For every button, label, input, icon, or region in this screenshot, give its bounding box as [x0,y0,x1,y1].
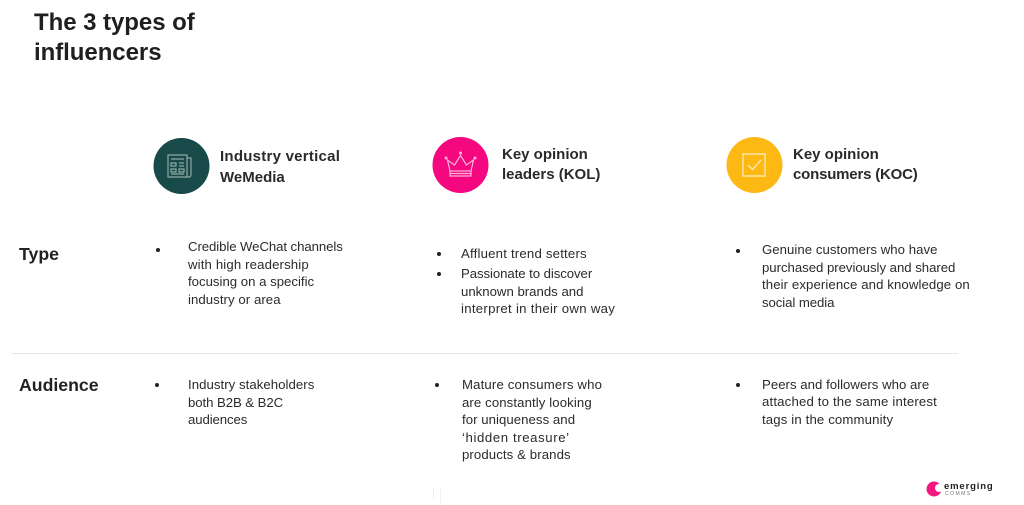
text block: KOC audience: attached to the same interest [762,394,937,409]
text block: WeMedia type [156,239,343,306]
title [34,9,195,66]
text block: KOC type: their experience and knowledge on [762,277,970,292]
icon: checkbox [726,137,782,193]
text block: KOC audience [736,376,937,426]
logo wordmark: emerging [944,481,994,492]
column header: Key opinion consumers (KOC) [726,137,918,193]
row label: Audience: Audience [19,375,99,395]
text block: KOL audience: Mature consumers who [462,377,602,392]
text block: WeMedia audience: Industry stakeholders [188,377,314,392]
text block: WeMedia type: with high readership [188,256,309,272]
heading: consumers (KOC) [793,166,918,183]
heading [220,148,340,186]
text block: KOL type [437,246,615,316]
text block: KOL type: interpret in their own way [461,301,615,316]
icon: newspaper [154,138,210,194]
text block: WeMedia audience: both B2B & B2C [188,394,283,410]
text block: WeMedia type: industry or area [188,292,281,306]
text block: KOC type: Genuine customers who have [762,242,938,257]
text block: KOL audience: products & brands [462,447,571,462]
heading: leaders (KOL) [502,166,600,183]
logo: emerging comms [926,481,994,497]
heading: WeMedia [220,169,285,186]
text block: KOC type: social media [762,294,834,310]
text block: WeMedia type: focusing on a specific [188,274,314,289]
text block: WeMedia type: Credible WeChat channels [188,239,343,254]
text block: KOL type: Affluent trend setters [461,246,587,261]
icon: crown [432,137,488,193]
heading: Key opinion [502,146,588,163]
logo mark [926,482,942,496]
title: influencers [34,39,162,66]
heading: Key opinion [793,146,879,163]
text block: KOL audience: are constantly looking [462,394,592,410]
text block: WeMedia audience: audiences [188,412,247,427]
text block: KOL audience: ‘hidden treasure’ [462,430,570,444]
heading: Industry vertical [220,148,340,165]
logo tagline: COMMS [945,491,972,497]
column header: Key opinion leaders (KOL) [432,137,600,193]
text block: KOC audience: tags in the community [762,412,893,426]
text block: KOC type [736,242,970,310]
column header: Industry vertical WeMedia [154,138,340,194]
text block: KOL type: Passionate to discover [461,266,592,281]
text block: KOL audience [435,377,602,462]
divider [12,353,958,354]
text block: KOL type: unknown brands and [461,284,583,298]
text block: KOC type: purchased previously and shared [762,260,955,274]
heading [793,146,918,183]
row label: Type: Type [19,244,59,264]
title: The 3 types of [34,9,195,36]
text block: KOC audience: Peers and followers who are [762,376,929,392]
text block: KOL audience: for uniqueness and [462,412,575,427]
text block: WeMedia audience [155,377,314,427]
heading [502,146,600,183]
